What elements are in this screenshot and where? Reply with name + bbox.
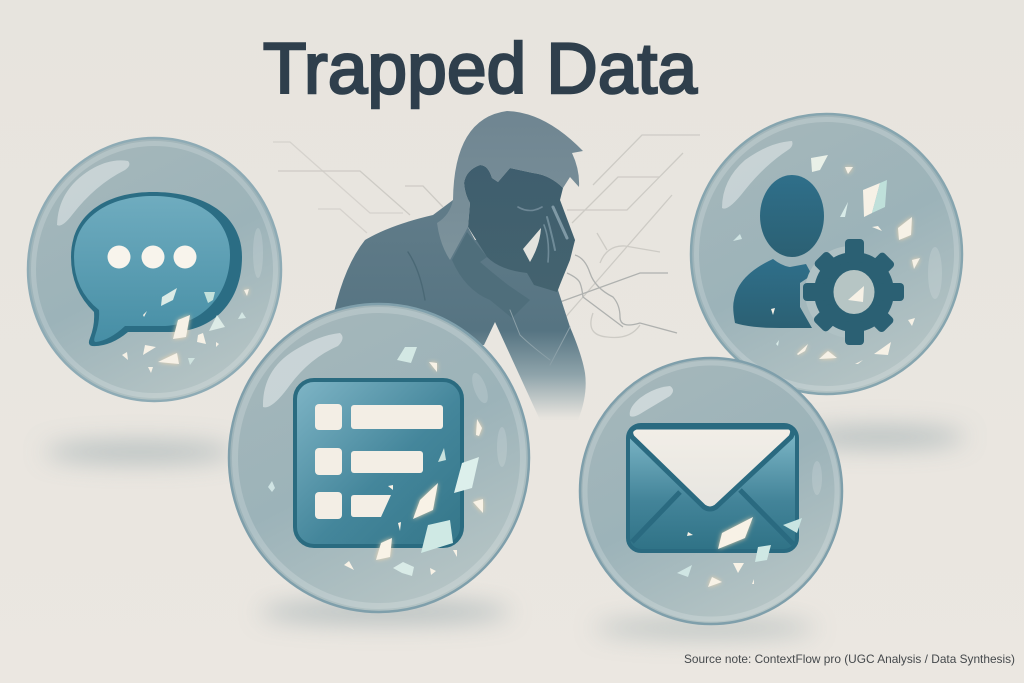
icon: three dots	[108, 246, 196, 268]
data shards	[733, 155, 920, 364]
gap under chin	[523, 228, 541, 262]
glass sphere	[691, 114, 962, 394]
icon: envelope	[628, 425, 797, 551]
source note: Source note: ContextFlow pro (UGC Analysis / Data Synthesis)	[684, 652, 1015, 666]
fingers and details	[408, 207, 570, 365]
bubble: center, form list	[229, 304, 529, 612]
highlights	[722, 141, 942, 299]
bubble: left, chat	[28, 138, 281, 401]
bubble: lower right, mail	[580, 358, 842, 624]
highlights	[630, 386, 822, 495]
person arm shade	[452, 232, 530, 318]
data shards	[268, 347, 483, 576]
person face and hand	[464, 165, 575, 292]
envelope folds	[632, 490, 793, 544]
frustrated person silhouette	[334, 111, 586, 420]
data shards	[677, 517, 802, 587]
icon: gear	[803, 239, 904, 345]
person body	[334, 200, 586, 420]
icon: chat bubble	[71, 192, 242, 346]
data shards	[122, 288, 249, 373]
glass sphere	[580, 358, 842, 624]
person hair	[437, 111, 583, 260]
highlights	[57, 160, 263, 278]
glass sphere	[28, 138, 281, 401]
form rows	[315, 404, 443, 519]
icon: form tile	[295, 380, 462, 546]
icon: person	[733, 175, 824, 328]
title: Trapped Data	[263, 30, 698, 109]
bubble ground shadows	[45, 427, 965, 637]
bubble: top right, person and gear	[691, 114, 962, 394]
glass sphere	[229, 304, 529, 612]
envelope flap	[631, 427, 793, 509]
circuit lines background	[273, 135, 700, 338]
highlights	[263, 333, 507, 467]
